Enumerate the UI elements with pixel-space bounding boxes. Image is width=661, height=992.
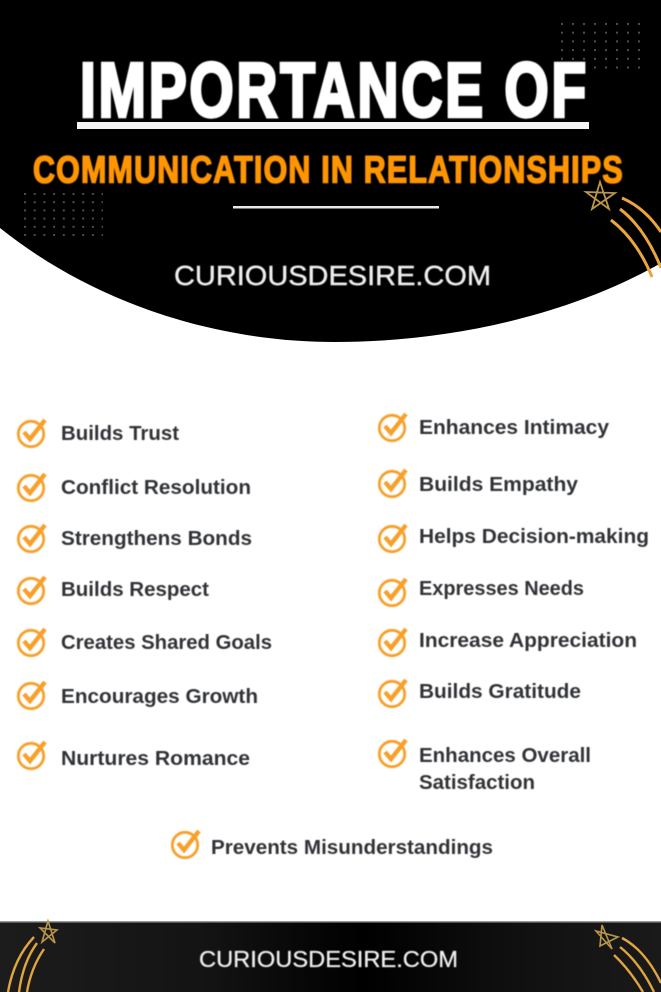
item: Enhances Intimacy [379, 414, 610, 441]
icon: shooting star top right [586, 182, 661, 277]
item: Increase Appreciation: Increase Appreciation [419, 630, 637, 652]
item: Helps Decision-making: Helps Decision-making [419, 526, 649, 548]
item: Enhances Overall Satisfaction [379, 740, 591, 794]
item: Expresses Needs: Expresses Needs [419, 578, 584, 600]
dot pattern: top right [561, 23, 647, 69]
item: Builds Empathy [379, 470, 579, 497]
item: Expresses Needs [379, 578, 584, 606]
title: IMPORTANCE OF [80, 48, 586, 134]
dot pattern: left [24, 193, 103, 236]
item: Nurtures Romance: Nurtures Romance [61, 748, 250, 770]
item: Strengthens Bonds: Strengthens Bonds [61, 528, 252, 550]
item: Builds Gratitude: Builds Gratitude [419, 681, 581, 703]
subtitle: COMMUNICATION IN RELATIONSHIPS [33, 149, 623, 191]
website label: footer: CURIOUSDESIRE.COM [199, 946, 458, 972]
divider line [233, 206, 439, 208]
item: Prevents Misunderstandings [172, 831, 493, 859]
item: Creates Shared Goals [18, 629, 272, 656]
item: Builds Trust: Builds Trust [61, 423, 179, 445]
header background curve [0, 0, 661, 342]
footer bar [0, 921, 661, 992]
checklist: right column [379, 414, 649, 794]
icon: shooting star footer right [596, 925, 661, 992]
item: Encourages Growth [18, 682, 258, 709]
item: Builds Trust [18, 420, 179, 447]
title underline [77, 122, 589, 129]
item: Enhances Overall Satisfaction: Enhances Overall [419, 745, 591, 767]
item: Builds Empathy: Builds Empathy [419, 474, 579, 496]
item: Nurtures Romance [18, 742, 250, 770]
item: Enhances Overall Satisfaction: Satisfaction [419, 772, 535, 794]
item: Conflict Resolution [18, 474, 251, 501]
item: Helps Decision-making [379, 525, 649, 552]
item: Prevents Misunderstandings: Prevents Misunderstandings [211, 837, 493, 859]
checklist: left column [18, 420, 272, 770]
item: Encourages Growth: Encourages Growth [61, 686, 258, 708]
item: Increase Appreciation [379, 629, 637, 656]
website label: header: CURIOUSDESIRE.COM [174, 260, 491, 291]
item: Conflict Resolution: Conflict Resolution [61, 477, 251, 499]
item: Enhances Intimacy: Enhances Intimacy [419, 417, 610, 439]
item: Builds Respect: Builds Respect [61, 579, 209, 601]
item: Builds Gratitude [379, 680, 581, 707]
icon: shooting star footer left [8, 921, 57, 992]
item: Strengthens Bonds [18, 525, 252, 552]
item: Builds Respect [18, 577, 209, 604]
item: Creates Shared Goals: Creates Shared Goals [61, 632, 272, 654]
